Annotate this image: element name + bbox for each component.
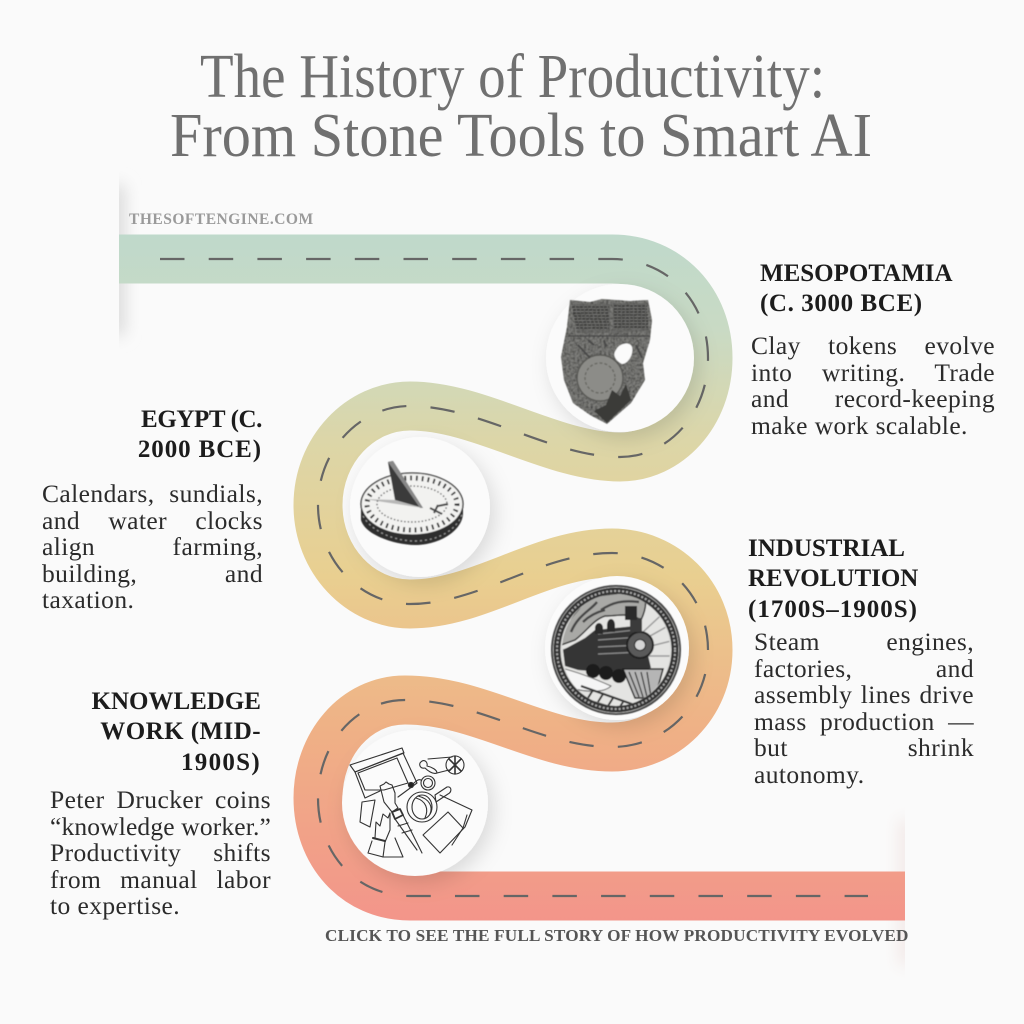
edge shadow: road start xyxy=(119,182,130,338)
heading: Egypt xyxy=(138,406,262,463)
text: Egypt: align farming, xyxy=(42,532,263,561)
title: The History of Productivity: xyxy=(200,43,825,111)
heading: Knowledge Work: 1900S) xyxy=(181,749,261,776)
text: Egypt: building, and xyxy=(42,559,263,588)
text: Egypt: taxation. xyxy=(42,585,134,614)
heading: Knowledge Work: KNOWLEDGE xyxy=(92,688,261,715)
heading: Egypt: 2000 BCE) xyxy=(138,436,262,463)
edge shadow: road end xyxy=(898,823,905,962)
heading: Industrial Revolution: INDUSTRIAL xyxy=(748,535,905,562)
site label: THESOFTENGINE.COM xyxy=(129,211,314,228)
text: Egypt: Calendars, sundials, xyxy=(42,479,263,508)
text: Industrial Revolution: Steam engines, xyxy=(754,627,974,656)
text: Knowledge Work: “knowledge worker.” xyxy=(50,812,271,841)
icon: clay tablet xyxy=(561,299,652,424)
text: Industrial Revolution: assembly lines drive xyxy=(754,680,974,709)
heading: Egypt: EGYPT (C. xyxy=(141,406,262,433)
title: From Stone Tools to Smart AI xyxy=(170,102,872,170)
text: Egypt: and water clocks xyxy=(42,506,263,535)
text: Industrial Revolution: but shrink xyxy=(754,733,974,762)
text: Knowledge Work: from manual labor xyxy=(50,865,271,894)
road illustration layer xyxy=(119,53,905,962)
circle: Mesopotamia xyxy=(546,284,694,432)
text: Knowledge Work xyxy=(50,785,271,920)
circle: Industrial xyxy=(545,576,689,720)
text: Mesopotamia: Clay tokens evolve xyxy=(751,331,995,360)
circle: Knowledge work xyxy=(342,730,488,876)
text: Egypt xyxy=(42,479,263,614)
text: Industrial Revolution: factories, and xyxy=(754,654,974,683)
icon: desk line art xyxy=(350,748,472,857)
icon: locomotive coin xyxy=(552,586,680,714)
text: Knowledge Work: to expertise. xyxy=(50,891,180,920)
heading: Mesopotamia: MESOPOTAMIA xyxy=(760,260,953,287)
heading: Knowledge Work: WORK (MID- xyxy=(100,718,261,745)
text: Industrial Revolution: mass production — xyxy=(754,707,974,736)
heading: Industrial Revolution: REVOLUTION xyxy=(748,565,918,592)
text: Industrial Revolution xyxy=(754,627,974,789)
circle: Egypt xyxy=(350,437,490,577)
heading: Mesopotamia xyxy=(760,260,953,317)
icon: sundial xyxy=(361,461,463,545)
call to action: CLICK TO SEE THE FULL STORY OF HOW PRODUCTIVITY EVOLVED xyxy=(325,926,909,945)
heading: Knowledge Work xyxy=(92,688,261,776)
heading: Industrial Revolution xyxy=(748,535,918,623)
text: Mesopotamia: make work scalable. xyxy=(751,411,968,440)
heading: Mesopotamia: (C. 3000 BCE) xyxy=(760,290,923,317)
text: Knowledge Work: Productivity shifts xyxy=(50,838,271,867)
text: Mesopotamia xyxy=(751,331,995,440)
smoke plume xyxy=(561,591,646,645)
heading: Industrial Revolution: (1700S–1900S) xyxy=(748,596,918,623)
text: Mesopotamia: and record-keeping xyxy=(751,384,995,413)
title xyxy=(170,43,872,170)
winding road xyxy=(119,259,905,896)
locomotive body xyxy=(563,626,651,674)
text: Industrial Revolution: autonomy. xyxy=(754,760,864,789)
road centre dashes xyxy=(160,259,868,896)
text: Mesopotamia: into writing. Trade xyxy=(751,358,995,387)
text: Knowledge Work: Peter Drucker coins xyxy=(50,785,271,814)
